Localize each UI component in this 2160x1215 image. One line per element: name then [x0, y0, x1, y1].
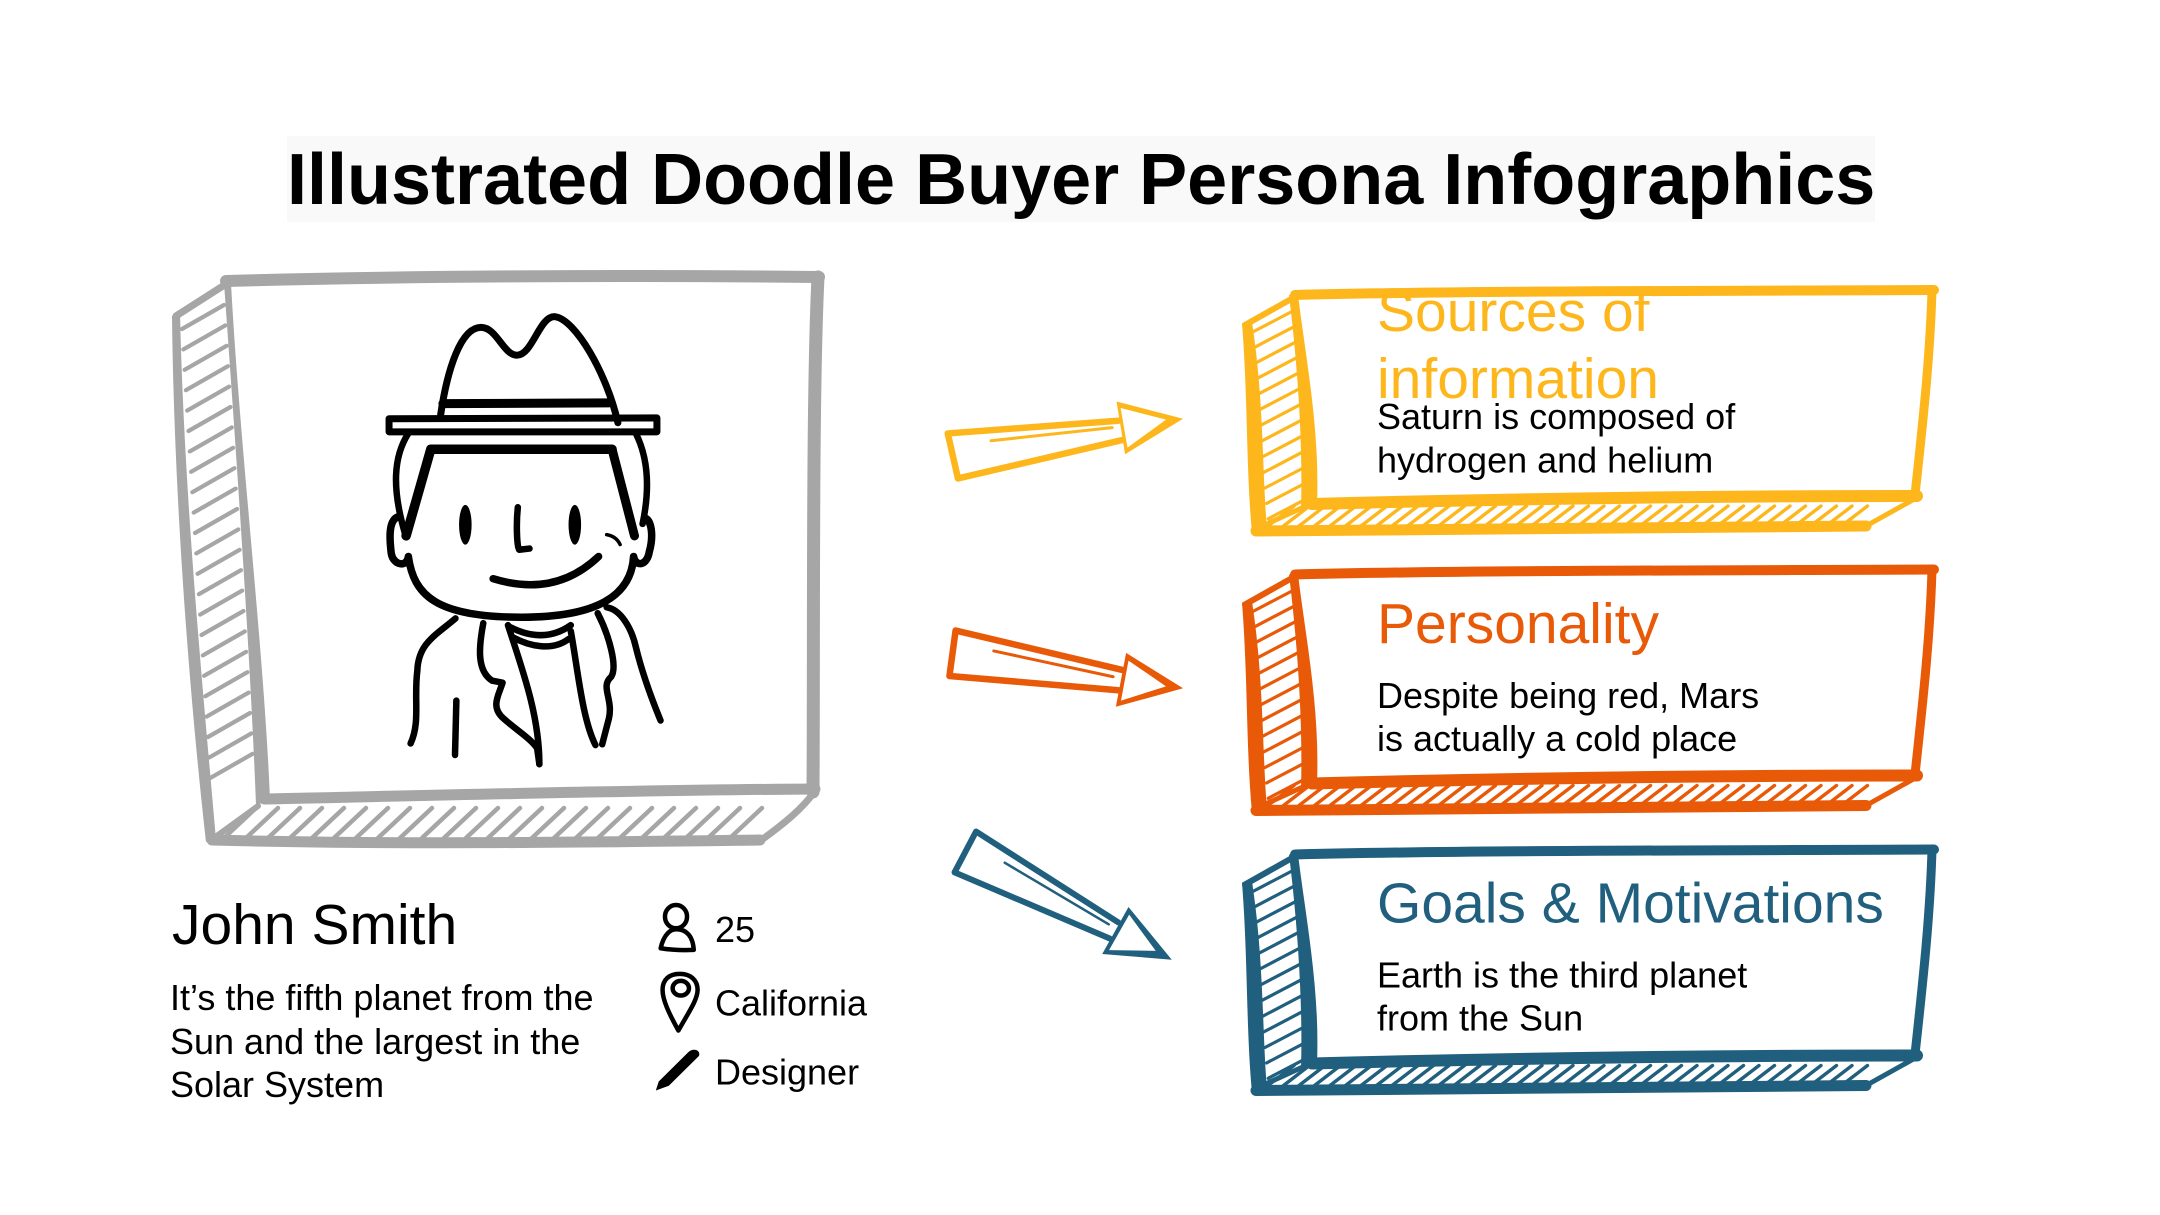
title: Illustrated Doodle Buyer Persona Infographics	[287, 140, 1875, 220]
card frame: yellow	[1242, 290, 1934, 533]
body: earth: from the Sun	[1377, 998, 1583, 1038]
panel: persona portrait frame	[172, 276, 819, 843]
heading: sources of information: Sources of	[1377, 280, 1650, 344]
body: saturn: Saturn is composed of	[1377, 396, 1736, 437]
icon: pencil	[656, 1050, 699, 1090]
location: California	[715, 982, 868, 1024]
body: mars: is actually a cold place	[1377, 718, 1737, 759]
card frame: orange	[1242, 570, 1934, 812]
heading: goals and motivations: Goals & Motivations	[1377, 872, 1884, 936]
body: mars: Despite being red, Mars	[1377, 675, 1759, 716]
body: earth: Earth is the third planet	[1377, 954, 1747, 996]
arrow: to goals and motivations	[955, 832, 1172, 960]
persona name: John Smith	[172, 893, 457, 957]
panel: goals and motivations	[1242, 850, 1934, 1092]
arrow: to sources of information	[948, 401, 1183, 478]
frame: sketched box	[172, 276, 819, 843]
occupation: Designer	[715, 1052, 859, 1092]
arrow: to personality	[949, 631, 1183, 707]
icon: person	[661, 905, 694, 950]
body: saturn: hydrogen and helium	[1377, 440, 1713, 480]
persona description: It’s the fifth planet from the	[170, 977, 594, 1018]
persona description: Sun and the largest in the	[170, 1021, 580, 1062]
panel: personality	[1242, 570, 1934, 812]
heading: sources of information: information	[1377, 347, 1659, 411]
card frame: blue	[1242, 850, 1934, 1092]
age: 25	[715, 909, 755, 950]
heading: personality: Personality	[1377, 592, 1659, 656]
icon: location pin	[663, 974, 698, 1031]
panel: sources of information	[1242, 280, 1934, 533]
persona description: Solar System	[170, 1064, 384, 1105]
illustration: man in hat with scarf	[389, 317, 661, 764]
